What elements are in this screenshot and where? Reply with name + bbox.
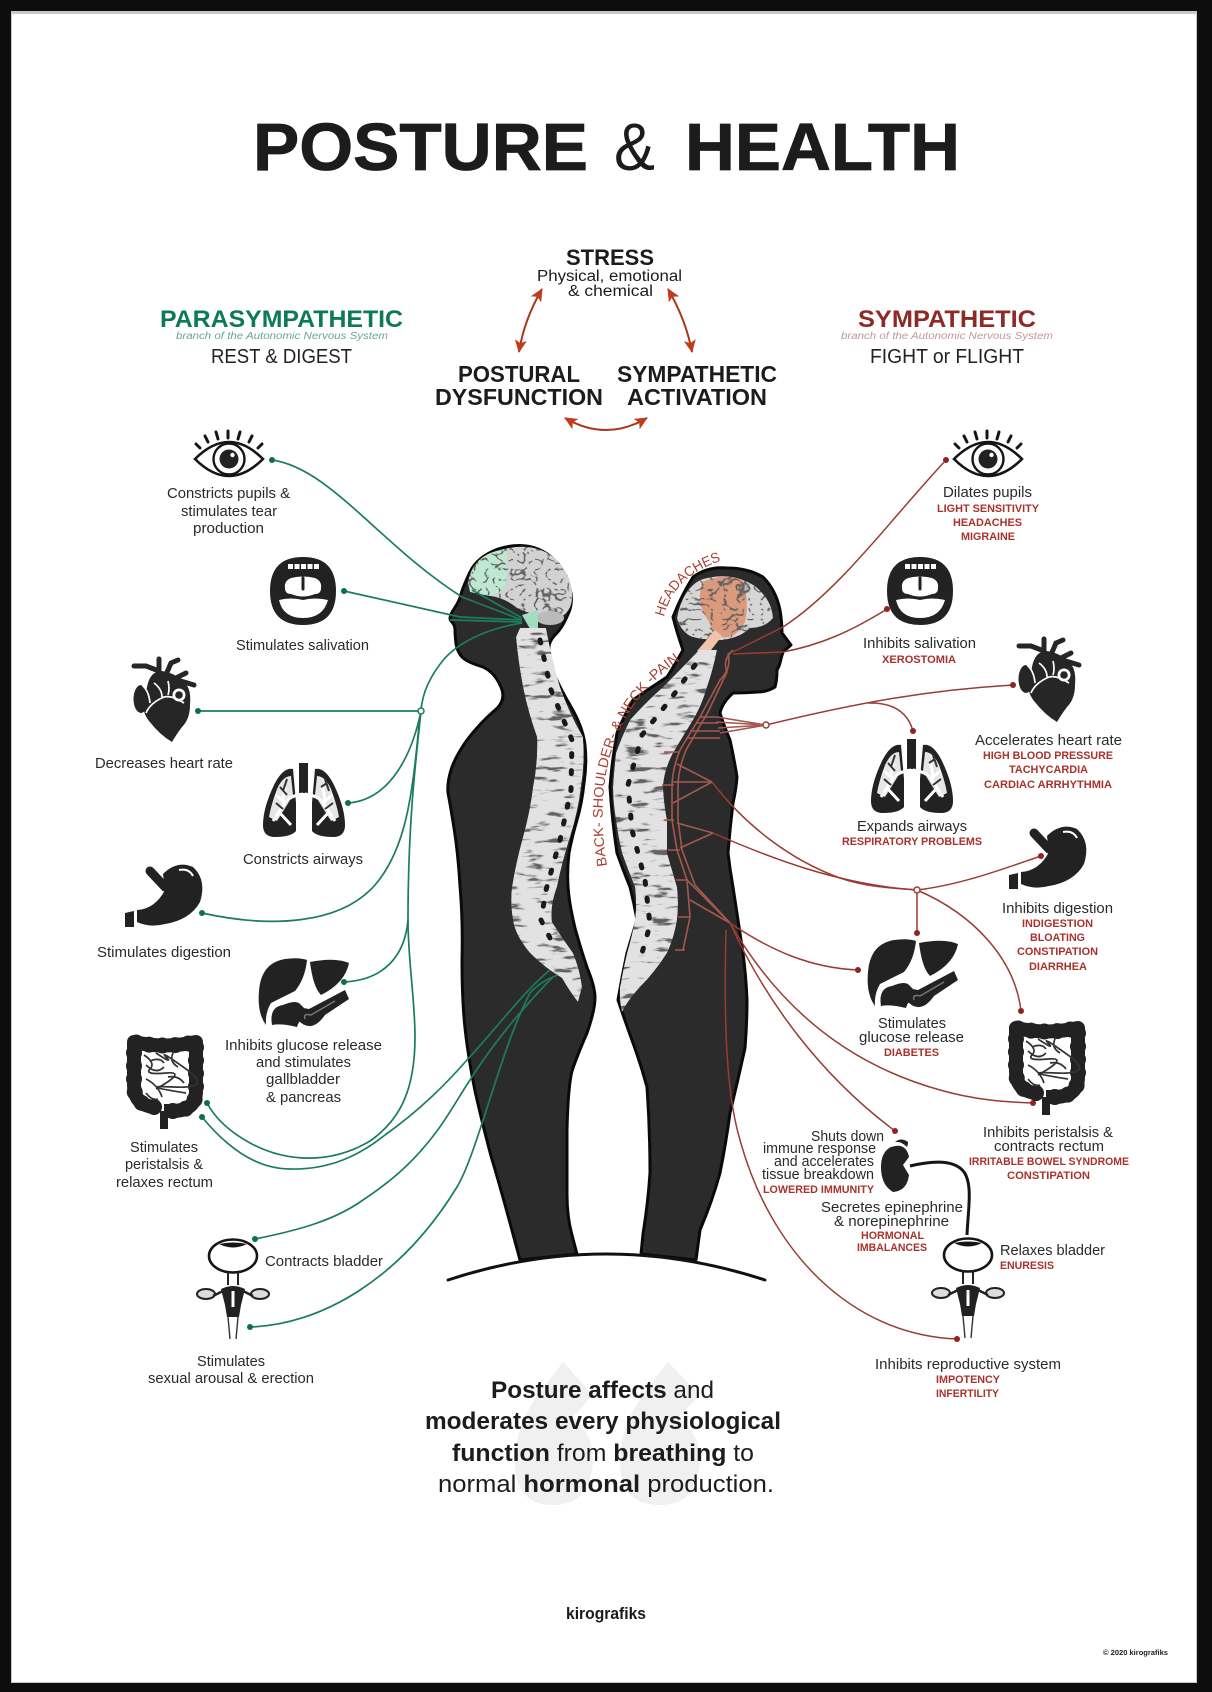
mouth: [887, 557, 953, 625]
symptom labels: MIGRAINE: [961, 531, 1015, 543]
nerve: vagus trunk and colon: [207, 623, 522, 1158]
symptom labels: INDIGESTION: [1022, 918, 1093, 930]
nerve: heart: [198, 710, 421, 712]
colon: [1016, 1028, 1080, 1115]
summary text: moderates every physiological: [425, 1408, 781, 1435]
parasympathetic effect labels: Stimulates: [130, 1140, 198, 1156]
title: [253, 110, 960, 185]
label curves: [603, 560, 724, 866]
parasympathetic heading: branch of the Autonomic Nervous System: [176, 331, 388, 342]
sympathetic effect labels: Inhibits peristalsis &: [983, 1125, 1113, 1141]
symptom labels: HEADACHES: [953, 517, 1022, 529]
silhouette: [448, 546, 595, 1260]
cycle arrows: [519, 289, 692, 430]
parasympathetic effect labels: & pancreas: [266, 1090, 341, 1106]
nerve: lungs: [348, 711, 421, 803]
parasympathetic effect labels: stimulates tear: [181, 504, 277, 520]
nerve: eye: [733, 460, 946, 652]
stomach: [1009, 827, 1086, 889]
eye: [195, 431, 263, 476]
junction: [418, 708, 424, 714]
sympathetic heading: FIGHT or FLIGHT: [870, 346, 1024, 368]
symptom labels: CONSTIPATION: [1007, 1170, 1090, 1182]
liver and pancreas: [868, 939, 958, 1008]
sympathetic effect labels: Inhibits salivation: [863, 636, 976, 652]
nerve: reproductive: [250, 975, 558, 1327]
sympathetic effect labels: Inhibits digestion: [1002, 901, 1113, 917]
junctions: [763, 722, 920, 893]
symptom labels: ENURESIS: [1000, 1260, 1054, 1272]
parasympathetic effect labels: Stimulates: [197, 1354, 265, 1370]
brain: [677, 576, 773, 654]
title: HEALTH: [685, 110, 960, 185]
sympathetic effect labels: tissue breakdown: [762, 1167, 874, 1183]
parasympathetic effect labels: Stimulates digestion: [97, 945, 231, 961]
sympathetic chain: [662, 650, 766, 950]
sympathetic effect labels: Accelerates heart rate: [975, 733, 1122, 749]
nerve: colon: [730, 923, 1033, 1103]
parasympathetic effect labels: [95, 486, 383, 1387]
lungs: [871, 739, 953, 813]
sympathetic nerves: [712, 457, 1044, 1342]
sympathetic effect labels: & norepinephrine: [834, 1214, 949, 1230]
nerve: liver: [344, 920, 408, 982]
nerve: liver: [730, 923, 858, 970]
parasympathetic heading: [160, 306, 403, 368]
nerve: colon lower: [202, 970, 550, 1169]
left body: parasympathetic figure: [448, 546, 595, 1260]
sympathetic activation: ACTIVATION: [627, 384, 767, 410]
symptom labels: INFERTILITY: [936, 1388, 1000, 1400]
parasympathetic effect labels: relaxes rectum: [116, 1175, 213, 1191]
nerve: stomach: [202, 725, 419, 921]
parasympathetic heading: REST & DIGEST: [211, 346, 352, 368]
stress cycle: [435, 245, 777, 430]
sympathetic heading: branch of the Autonomic Nervous System: [841, 331, 1053, 342]
symptom labels: TACHYCARDIA: [1009, 764, 1088, 776]
postural dysfunction: [435, 361, 603, 410]
sympathetic effect labels: Inhibits reproductive system: [875, 1357, 1061, 1373]
silhouette: [610, 568, 791, 1260]
nerve: mouth: [733, 609, 887, 654]
parasympathetic effect labels: Decreases heart rate: [95, 756, 233, 772]
title: &: [614, 110, 655, 185]
sympathetic effect labels: Stimulates: [878, 1016, 946, 1032]
nerve: liver and colon branch: [712, 782, 1021, 1011]
sympathetic activation: SYMPATHETIC: [617, 361, 777, 387]
nerve: heart: [766, 685, 1013, 725]
sympathetic effect labels: Relaxes bladder: [1000, 1243, 1105, 1259]
heart: [134, 659, 194, 742]
nerve terminals: [855, 457, 1044, 1342]
lungs: [263, 763, 345, 837]
bladder and reproductive organs: [197, 1240, 269, 1339]
nerve: bladder: [255, 977, 553, 1239]
parasympathetic effect labels: Stimulates salivation: [236, 638, 369, 654]
sympathetic effect labels: [762, 485, 1122, 1373]
sympathetic effect labels: Shuts down: [811, 1129, 884, 1145]
parasympathetic effect labels: Constricts airways: [243, 852, 363, 868]
bladder and reproductive organs: [932, 1238, 1004, 1338]
nerve: stomach: [713, 833, 1041, 890]
title: POSTURE: [253, 110, 588, 185]
ground line: [448, 1254, 765, 1280]
right body: sympathetic figure: [610, 568, 791, 1260]
sympathetic effect labels: contracts rectum: [994, 1139, 1104, 1155]
postural dysfunction: DYSFUNCTION: [435, 384, 603, 410]
nerve: lungs: [868, 703, 913, 731]
postural dysfunction: POSTURAL: [458, 361, 580, 387]
symptom labels: IMBALANCES: [857, 1242, 927, 1254]
stress heading: STRESS: [566, 245, 654, 270]
sympathetic heading: [841, 306, 1053, 368]
heart: [1018, 639, 1079, 722]
symptom labels: CARDIAC ARRHYTHMIA: [984, 779, 1112, 791]
symptom labels: [763, 503, 1129, 1400]
summary text: Posture affects and: [491, 1377, 714, 1404]
stress heading: [537, 245, 682, 300]
sympathetic activation: [617, 361, 777, 410]
symptom labels: IMPOTENCY: [936, 1374, 1001, 1386]
icon: kidney: [881, 1140, 909, 1192]
nerve terminals: [195, 457, 351, 1330]
symptom labels: RESPIRATORY PROBLEMS: [842, 836, 982, 848]
stress heading: & chemical: [568, 283, 653, 300]
symptom labels: IRRITABLE BOWEL SYNDROME: [969, 1156, 1129, 1168]
copyright: © 2020 kirografiks: [1103, 1649, 1168, 1657]
curved label: back, shoulder and neck pain: BACK- SHOULDER- & NECK -PAIN: [592, 653, 679, 866]
sympathetic effect labels: glucose release: [859, 1030, 964, 1046]
spine: [511, 628, 584, 1002]
sympathetic effect labels: Dilates pupils: [943, 485, 1032, 501]
mouth: [270, 557, 336, 625]
parasympathetic heading: PARASYMPATHETIC: [160, 306, 403, 333]
stomach: [125, 865, 202, 927]
parasympathetic nerves: [195, 457, 558, 1330]
nerve: kidney: [730, 923, 895, 1131]
quote watermark: [515, 1362, 700, 1505]
nerve: eye: [272, 460, 522, 620]
symptom labels: DIABETES: [884, 1047, 939, 1059]
symptom labels: XEROSTOMIA: [882, 654, 956, 666]
parasympathetic organs and labels: [95, 431, 383, 1387]
parasympathetic effect labels: and stimulates: [256, 1055, 351, 1071]
symptom labels: DIARRHEA: [1029, 961, 1087, 973]
sympathetic effect labels: immune response: [763, 1141, 876, 1157]
curved label: headaches: HEADACHES: [655, 552, 720, 616]
nerve: face fan: [450, 590, 522, 622]
summary text: function from breathing to: [452, 1440, 754, 1467]
adrenal link: [910, 1162, 969, 1235]
brand: kirografiks: [566, 1604, 646, 1623]
liver and pancreas: [259, 958, 349, 1027]
sympathetic effect labels: Expands airways: [857, 819, 967, 835]
brain: [468, 547, 572, 625]
parasympathetic effect labels: production: [193, 521, 264, 537]
stress heading: Physical, emotional: [537, 268, 682, 285]
colon: [134, 1042, 198, 1129]
eye: [954, 431, 1022, 476]
parasympathetic effect labels: Contracts bladder: [265, 1254, 383, 1270]
symptom labels: HORMONAL: [861, 1230, 924, 1242]
parasympathetic effect labels: gallbladder: [266, 1072, 340, 1088]
summary text: normal hormonal production.: [438, 1471, 774, 1498]
sympathetic organs and labels: [762, 431, 1129, 1400]
symptom labels: HIGH BLOOD PRESSURE: [983, 750, 1113, 762]
symptom labels: BLOATING: [1030, 932, 1085, 944]
parasympathetic effect labels: peristalsis &: [125, 1157, 203, 1173]
summary text: [425, 1377, 781, 1498]
sympathetic effect labels: Secretes epinephrine: [821, 1200, 963, 1216]
symptom labels: CONSTIPATION: [1017, 946, 1098, 958]
nerve: reproductive: [725, 930, 957, 1339]
sympathetic heading: SYMPATHETIC: [858, 306, 1036, 333]
symptom labels: LIGHT SENSITIVITY: [937, 503, 1040, 515]
brainstem: [522, 610, 538, 634]
symptom labels: LOWERED IMMUNITY: [763, 1184, 875, 1196]
parasympathetic effect labels: sexual arousal & erection: [148, 1371, 314, 1387]
spine: [613, 650, 717, 1012]
sympathetic effect labels: and accelerates: [774, 1154, 874, 1170]
nerve: mouth: [344, 591, 522, 620]
parasympathetic effect labels: Constricts pupils &: [167, 486, 290, 502]
parasympathetic effect labels: Inhibits glucose release: [225, 1038, 382, 1054]
